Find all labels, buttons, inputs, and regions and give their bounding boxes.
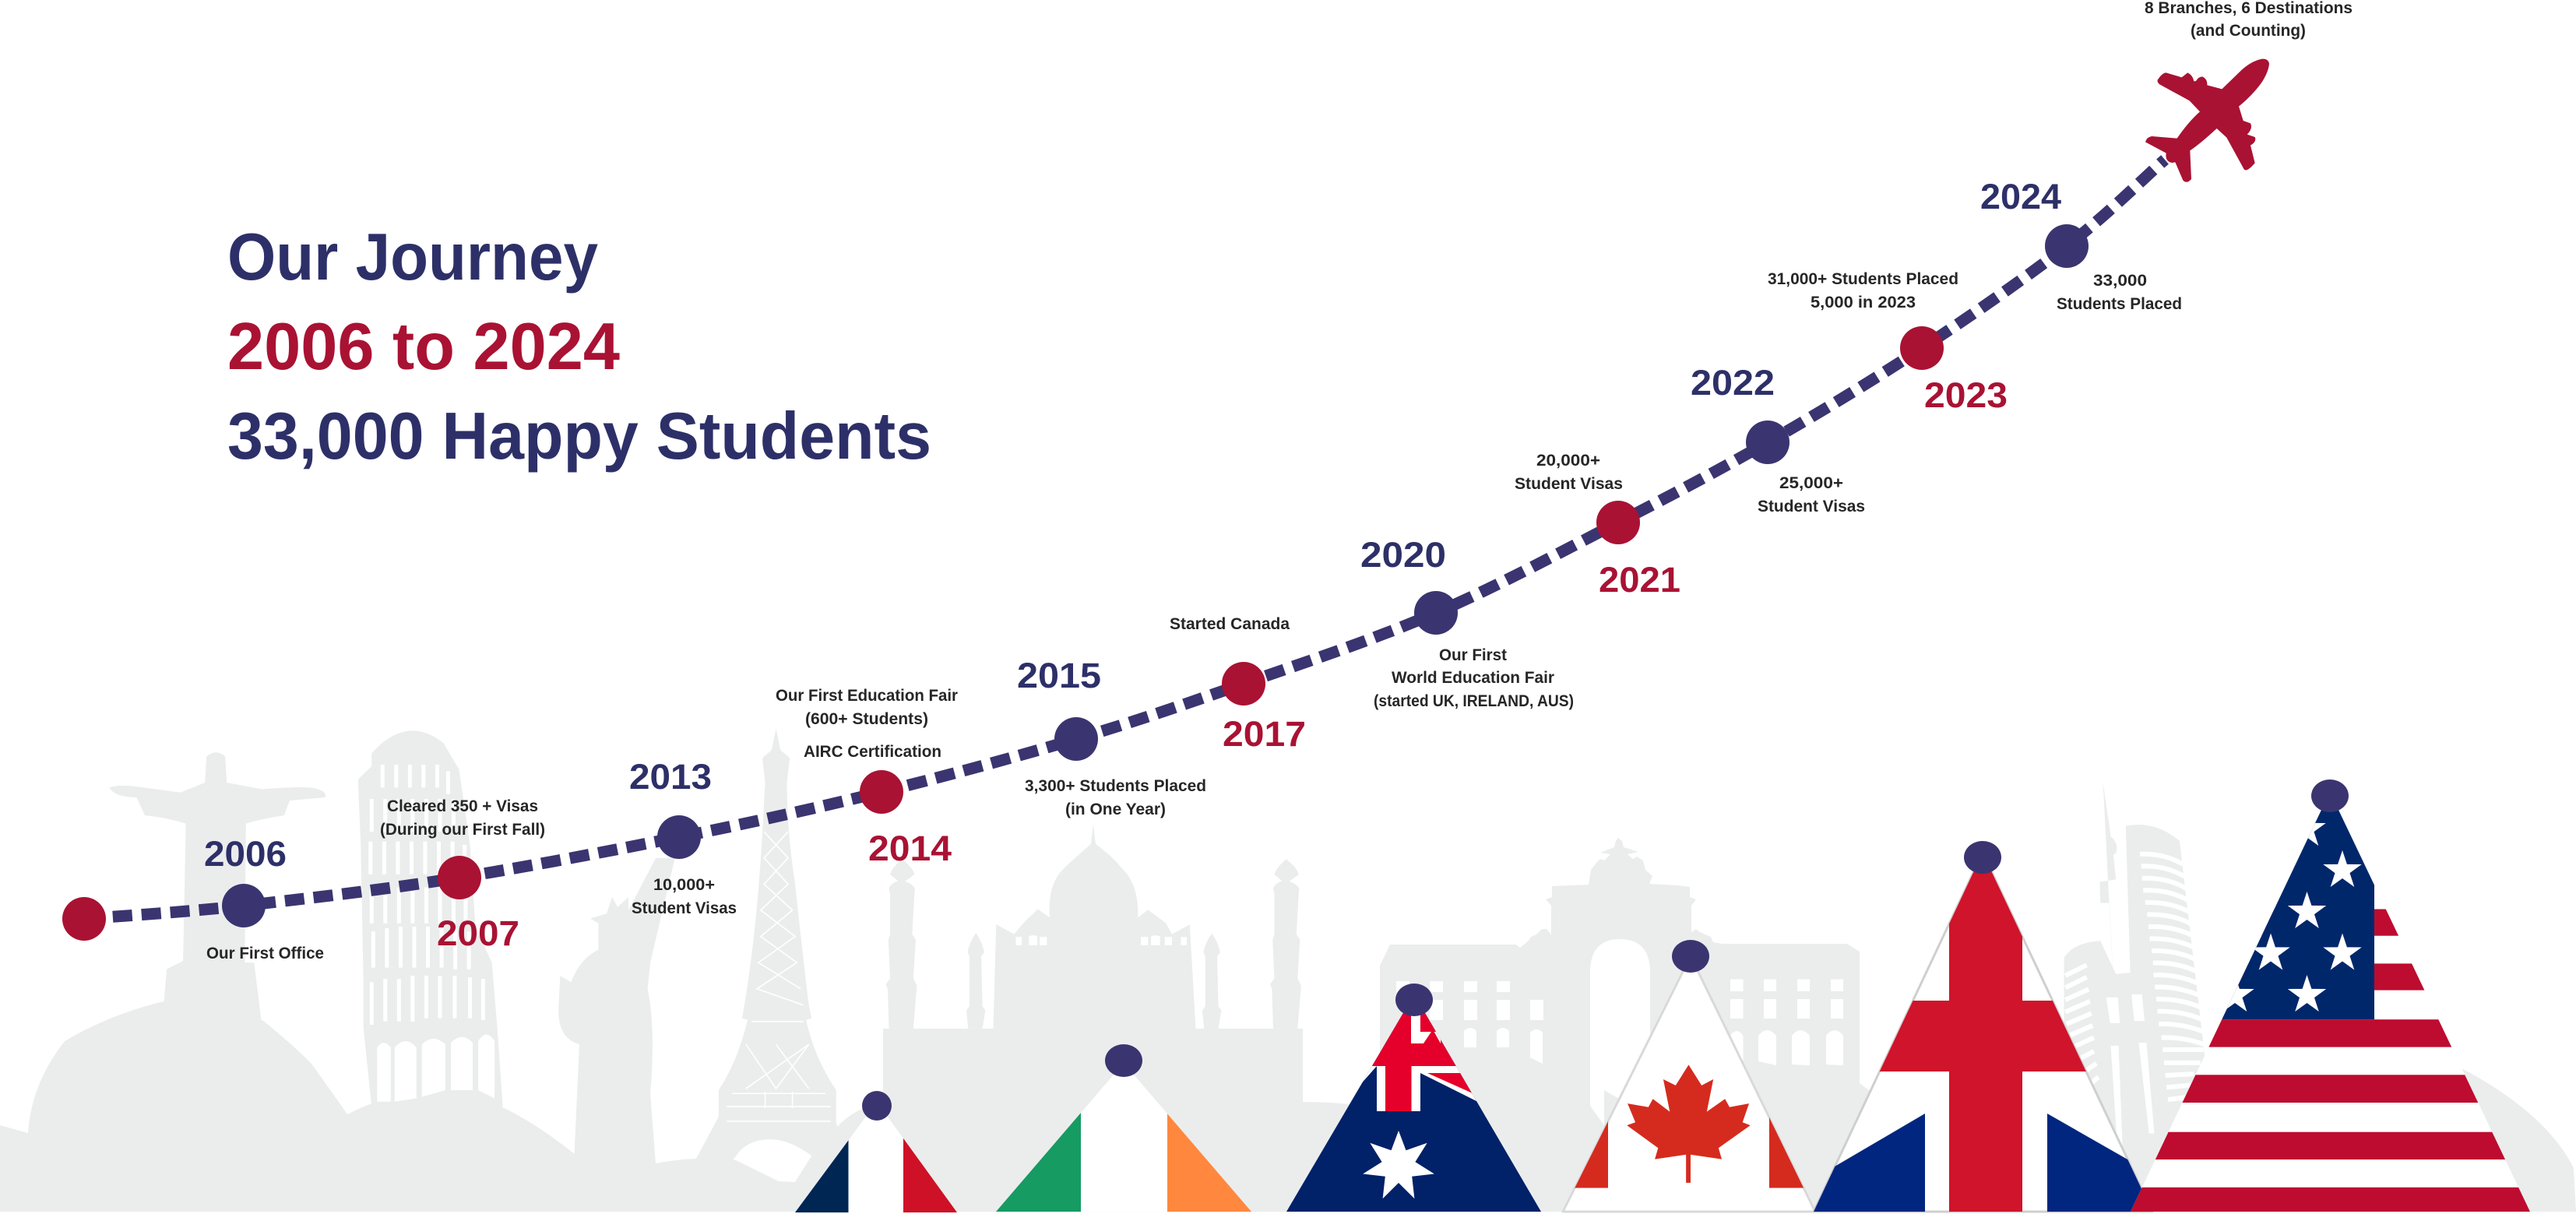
milestone captions: 3,300+ Students Placed — [1025, 777, 1206, 795]
milestone captions: Started Canada — [1170, 615, 1290, 633]
maple leaf — [1627, 1064, 1751, 1183]
landmark: skyscraper — [2064, 782, 2209, 1163]
landmark: Eiffel Tower — [694, 729, 845, 1162]
milestone captions: 10,000+ — [653, 876, 715, 894]
milestone captions: (started UK, IRELAND, AUS) — [1374, 692, 1574, 710]
milestone captions: Student Visas — [1758, 498, 1865, 516]
milestone captions: (in One Year) — [1065, 801, 1166, 818]
dashed flight path — [84, 160, 2165, 919]
landmark: Christ the Redeemer — [109, 752, 326, 1020]
year labels: 2021 — [1599, 560, 1680, 600]
milestone captions: AIRC Certification — [804, 743, 941, 761]
canton with stars — [2222, 810, 2374, 1020]
milestone captions — [206, 0, 2353, 962]
milestone captions: Our First Education Fair — [776, 687, 958, 705]
year labels: 2007 — [437, 913, 519, 953]
Commonwealth star — [1363, 1131, 1434, 1198]
milestone captions: Student Visas — [1515, 475, 1623, 493]
icon: airplane — [2145, 59, 2269, 182]
milestone captions: World Education Fair — [1392, 669, 1554, 687]
milestone captions: 5,000 in 2023 — [1811, 294, 1916, 311]
year labels: 2022 — [1691, 363, 1775, 403]
milestone captions: Students Placed — [2057, 295, 2182, 313]
flag: France — [795, 1117, 957, 1212]
skyline background silhouettes — [0, 729, 2576, 1212]
landmark: hills and ground — [0, 1001, 2576, 1212]
timeline milestone dots — [62, 224, 2089, 941]
milestone captions: 25,000+ — [1779, 474, 1843, 492]
milestone captions: 33,000 — [2093, 272, 2147, 290]
landmark: Taj Mahal — [883, 825, 1303, 1212]
milestone captions: Cleared 350 + Visas — [387, 797, 538, 815]
title line: 33,000 Happy Students: 33,000 Happy Students — [227, 399, 931, 473]
milestone captions: Our First — [1439, 646, 1507, 664]
flag: Ireland — [996, 1075, 1251, 1212]
title line: Our Journey: Our Journey — [227, 220, 598, 294]
year labels: 2017 — [1223, 714, 1306, 754]
milestone captions: (During our First Fall) — [380, 821, 545, 839]
landmark: Statue of Liberty — [558, 858, 675, 1166]
milestone captions: 20,000+ — [1536, 452, 1600, 470]
year labels: 2006 — [204, 834, 287, 874]
milestone captions: Student Visas — [632, 899, 737, 917]
milestone captions: (600+ Students) — [805, 710, 928, 728]
year labels — [204, 177, 2061, 953]
flag: Canada — [1557, 956, 1820, 1212]
title line: 2006 to 2024: 2006 to 2024 — [227, 310, 620, 384]
flag: Australia — [1286, 1012, 1541, 1212]
title block — [227, 220, 931, 473]
flag: United States — [2126, 786, 2535, 1212]
year labels: 2020 — [1360, 535, 1446, 575]
landmark: Leaning Tower of Pisa — [358, 730, 503, 1107]
landmark: triumphal arch and arcaded building — [1380, 838, 1869, 1199]
milestone captions: 31,000+ Students Placed — [1768, 270, 1958, 288]
year labels: 2013 — [629, 757, 712, 797]
year labels: 2024 — [1980, 177, 2061, 216]
year labels: 2014 — [868, 829, 952, 868]
milestone captions: (and Counting) — [2191, 22, 2306, 40]
milestone captions: Our First Office — [206, 945, 324, 962]
flag: United Kingdom — [1807, 849, 2157, 1214]
flag-top dots — [862, 779, 2349, 1121]
year labels: 2023 — [1924, 375, 2008, 415]
year labels: 2015 — [1017, 656, 1101, 695]
